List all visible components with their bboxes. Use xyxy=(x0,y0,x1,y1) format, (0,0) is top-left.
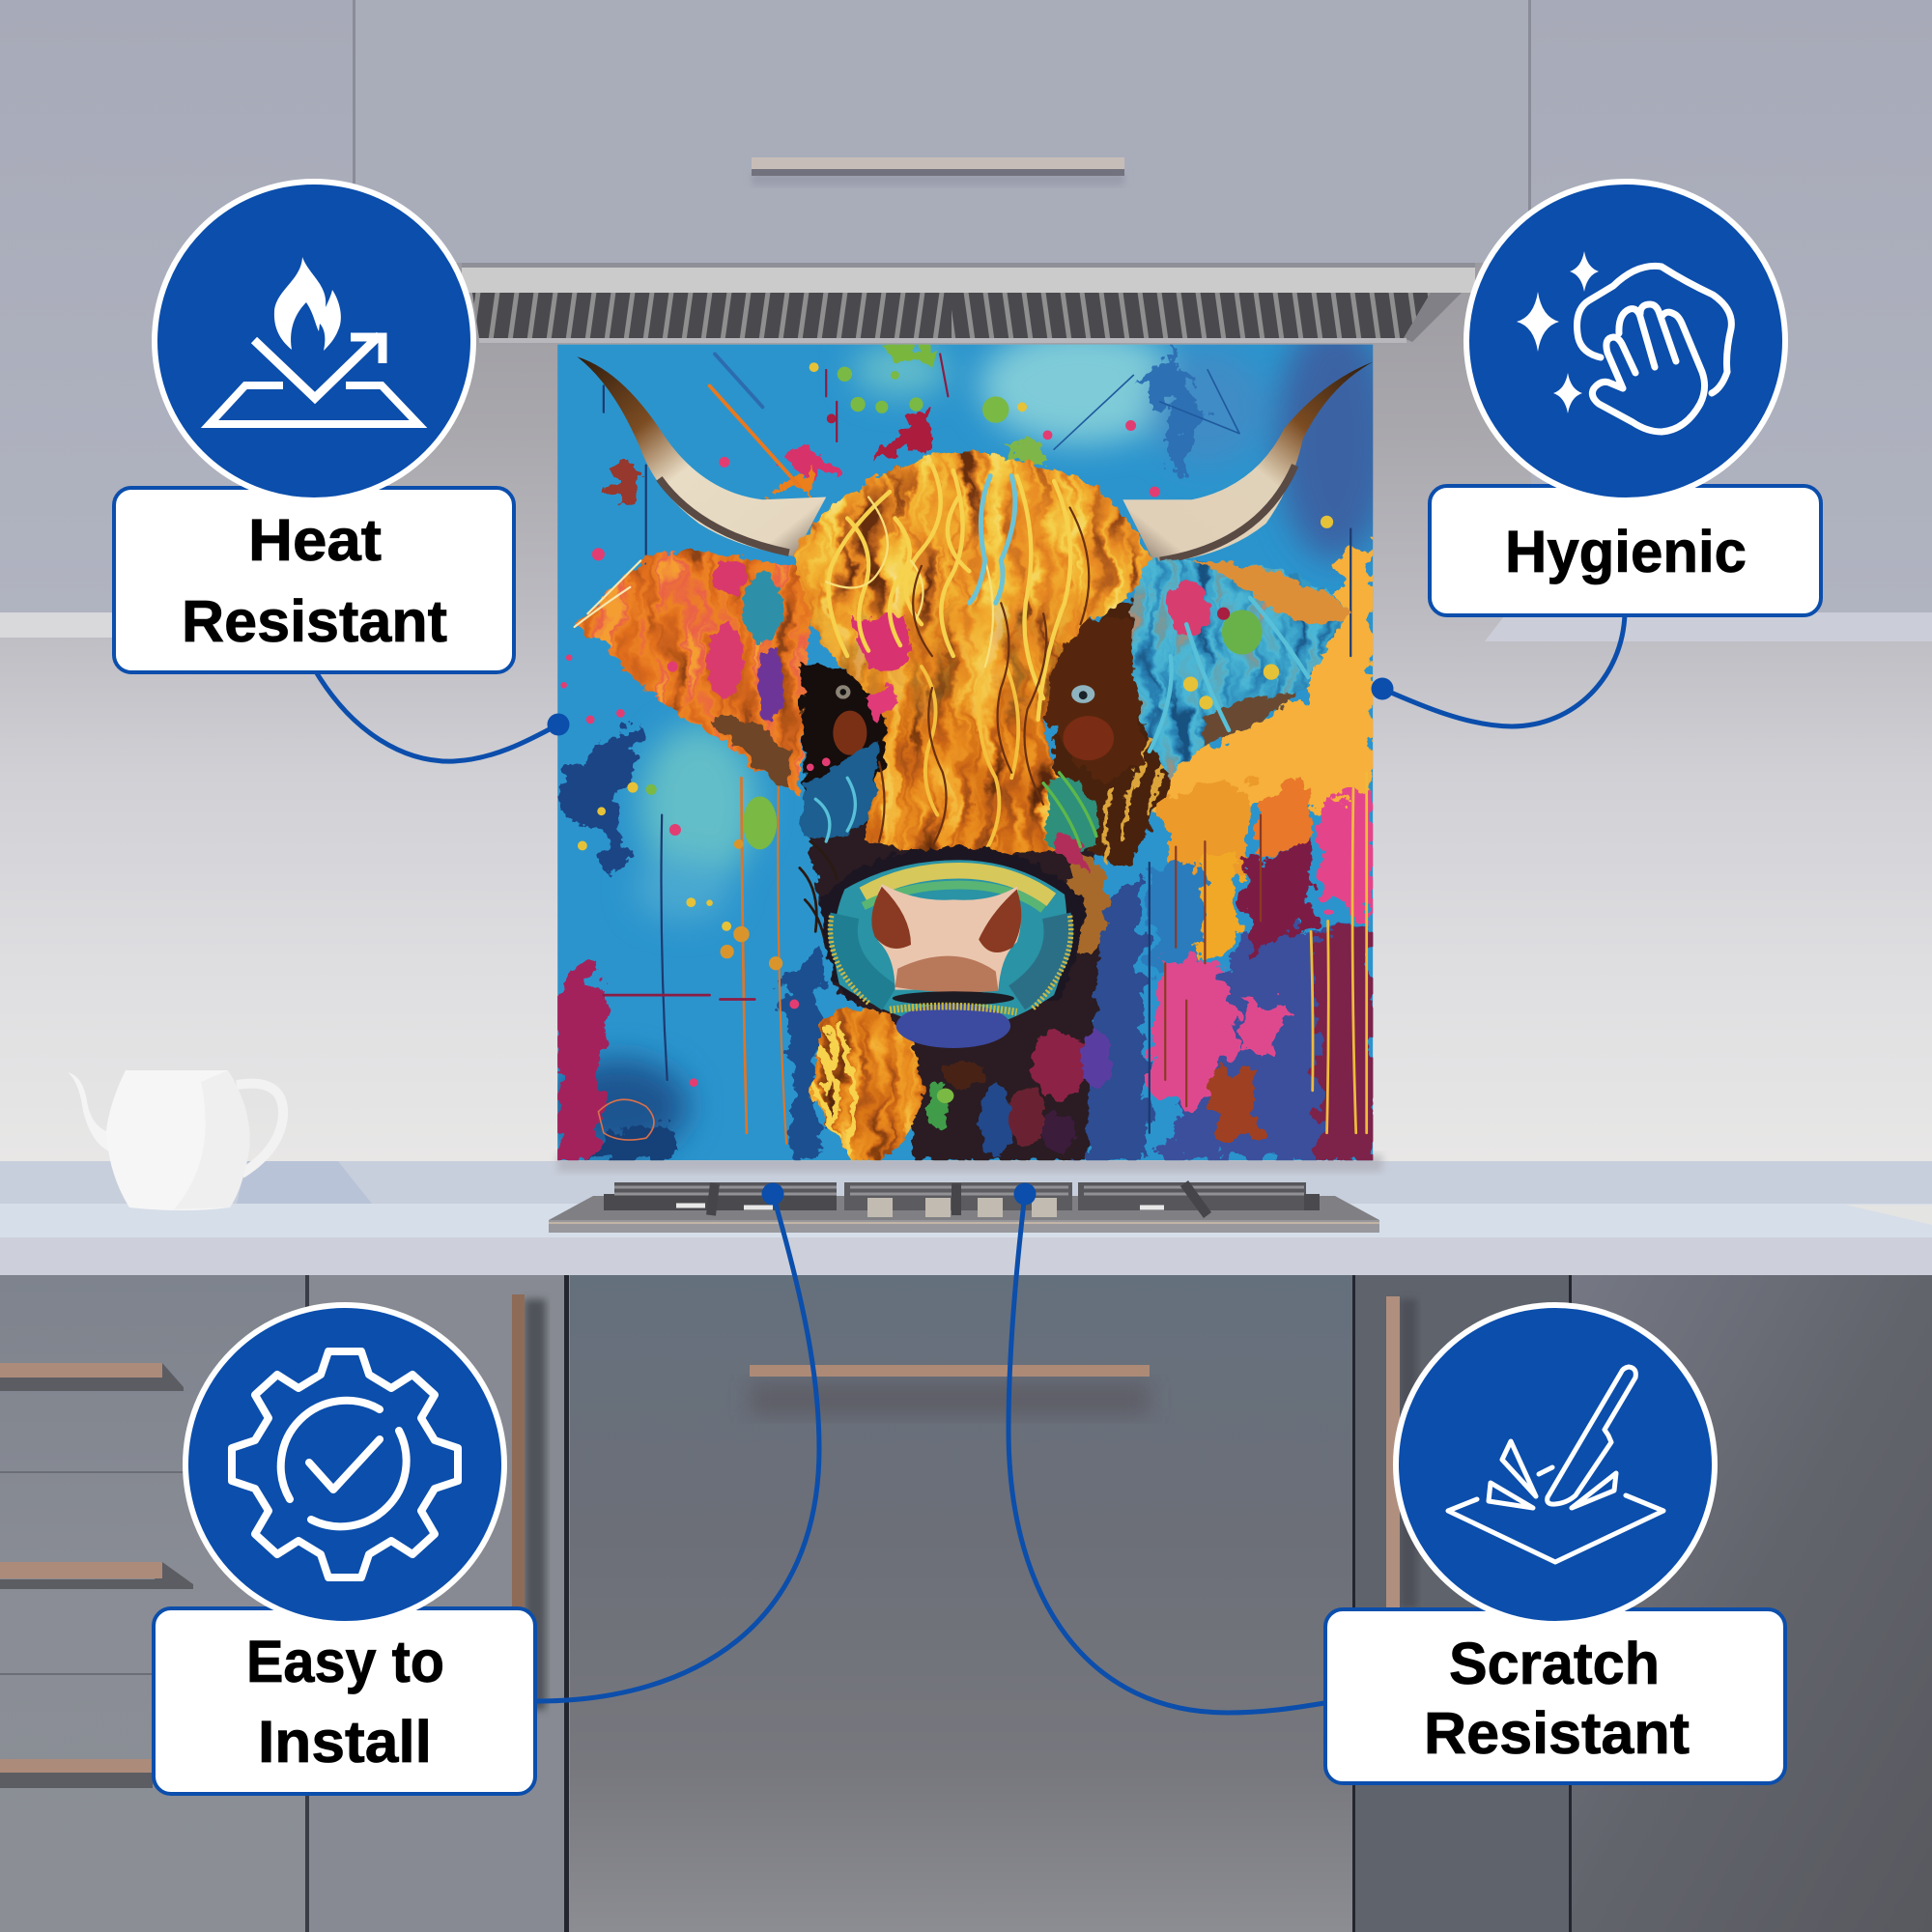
label text xyxy=(182,507,447,654)
gas cooktop xyxy=(549,1182,1379,1233)
fuchsia and green paint patches on hair xyxy=(850,613,1096,870)
icon badge xyxy=(1396,1305,1715,1624)
neck and body shadow xyxy=(805,788,1101,1160)
connector dot xyxy=(761,1182,784,1206)
fur strands xyxy=(575,466,1308,948)
panel shadow xyxy=(557,1154,1382,1172)
eye areas xyxy=(800,618,1144,837)
connector dot xyxy=(547,713,570,736)
left ear fur xyxy=(575,549,811,798)
icon: hand wiping with sparkles xyxy=(1517,251,1731,432)
upper cabinets xyxy=(0,0,1932,641)
label text: Resistant xyxy=(182,588,447,654)
label text: Hygienic xyxy=(1505,519,1747,584)
connector dot xyxy=(1372,678,1393,699)
label text: Easy to xyxy=(246,1629,444,1694)
dark fur right of face xyxy=(1054,603,1173,868)
icon: knife scratching surface xyxy=(1448,1367,1663,1562)
horns xyxy=(577,356,1373,563)
connector line xyxy=(1009,1194,1324,1713)
connector dot xyxy=(1014,1182,1036,1206)
label box xyxy=(114,488,514,672)
icon: gear with check mark xyxy=(232,1351,458,1577)
paint splats xyxy=(557,345,1373,1160)
beard xyxy=(808,1007,926,1161)
muzzle xyxy=(821,846,1086,1048)
label text: Scratch xyxy=(1449,1631,1660,1696)
cabinet handles xyxy=(0,1294,1417,1788)
drips and streaks xyxy=(604,354,1367,1144)
face hair mass xyxy=(794,449,1152,855)
top cabinet handle xyxy=(752,157,1124,185)
white teapot xyxy=(68,1070,283,1210)
label box xyxy=(1430,486,1821,615)
label box xyxy=(154,1608,535,1794)
callout: Heat Resistant xyxy=(114,182,570,761)
gold strands right of face xyxy=(1101,737,1165,866)
painted highland cow splashback panel xyxy=(551,317,1393,1165)
wall xyxy=(0,263,1932,1161)
callout: Hygienic xyxy=(1372,182,1821,726)
icon: flame over surface with arrow xyxy=(210,257,418,424)
callout: Scratch Resistant xyxy=(1009,1182,1785,1783)
label text: Resistant xyxy=(1424,1700,1690,1766)
label text xyxy=(246,1629,444,1775)
lower cabinets xyxy=(0,1275,1932,1932)
label text: Heat xyxy=(248,507,382,573)
connector line xyxy=(537,1194,819,1701)
cooker hood xyxy=(462,263,1475,343)
painting background colour washes xyxy=(551,317,1393,1160)
connector line xyxy=(1382,613,1625,726)
label text: Install xyxy=(258,1709,432,1775)
body colour patches xyxy=(926,855,1112,1159)
green paint blob on ear xyxy=(1222,610,1263,654)
icon badge xyxy=(1466,182,1785,500)
signature scribble xyxy=(598,1099,654,1140)
countertop xyxy=(0,1161,1932,1275)
label box xyxy=(1325,1609,1785,1783)
connector line xyxy=(314,668,558,761)
icon badge xyxy=(155,182,473,500)
label text xyxy=(1424,1631,1690,1766)
callout: Easy to Install xyxy=(154,1182,819,1794)
right ear fur xyxy=(1122,550,1356,783)
paint splatter dots xyxy=(560,362,1333,1103)
icon badge xyxy=(185,1305,504,1624)
